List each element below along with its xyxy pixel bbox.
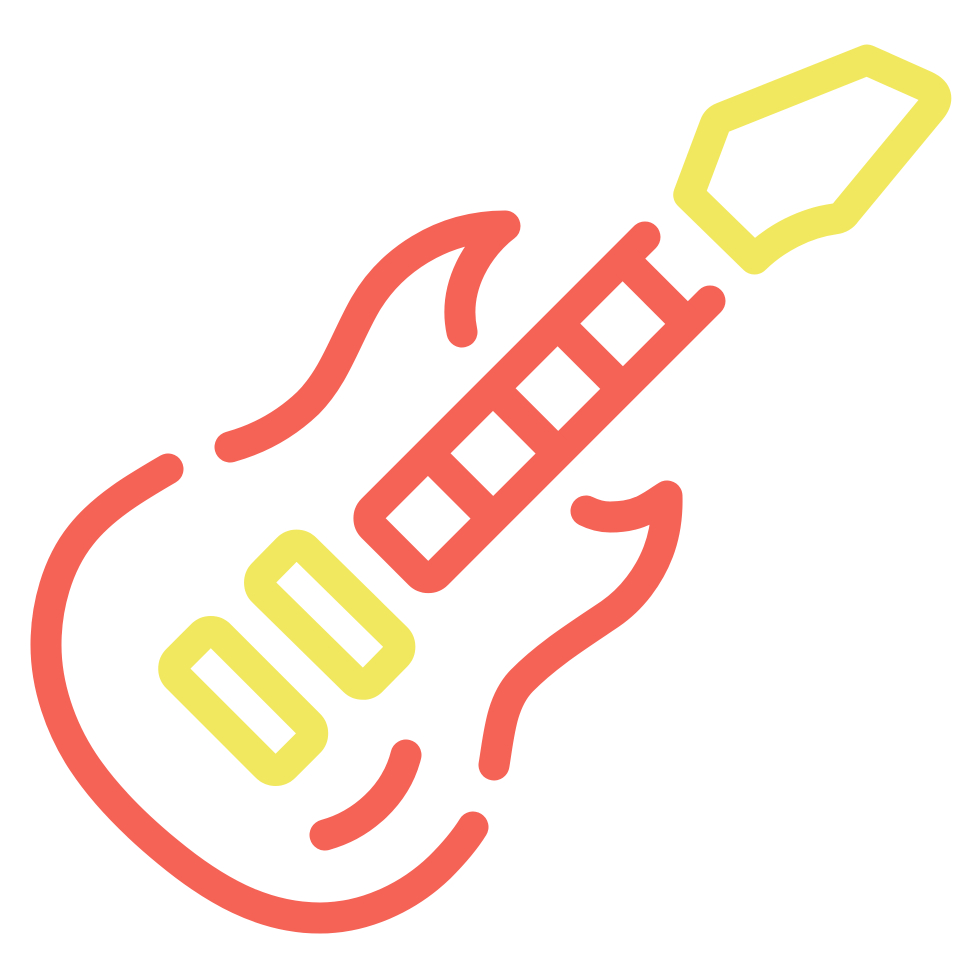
- guitar bridge curve: [325, 755, 406, 835]
- pickup two: [169, 626, 318, 776]
- pickup one: [254, 540, 405, 689]
- guitar neck and fretboard: [369, 237, 710, 578]
- guitar body upper horn: [230, 226, 505, 447]
- guitar body left curve: [46, 469, 473, 918]
- guitar headstock: [689, 60, 936, 259]
- guitar body lower horn: [494, 496, 667, 765]
